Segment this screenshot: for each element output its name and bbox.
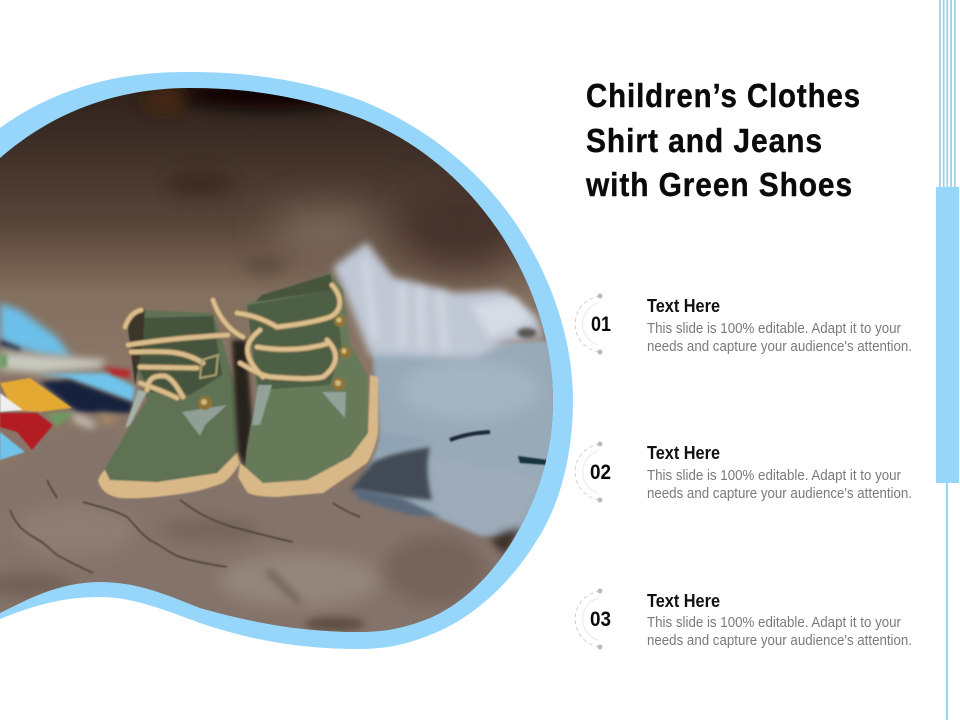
text block 02	[647, 443, 912, 502]
blue blob frame	[0, 72, 573, 649]
icon: number ring 03: 03	[590, 608, 611, 631]
icon: number ring 03	[575, 588, 611, 650]
striped clothes at left	[0, 303, 135, 460]
photo: baby boots on blanket	[0, 80, 560, 640]
icon: number ring 01: 01	[591, 313, 611, 336]
text block 03	[647, 591, 912, 649]
text block 03: This slide is 100% editable. Adapt it to your	[647, 615, 901, 631]
text block 02: This slide is 100% editable. Adapt it to your	[647, 468, 901, 484]
left boot	[98, 308, 240, 498]
item 03	[575, 588, 912, 650]
text block 01: needs and capture your audience's attention.	[647, 339, 912, 355]
right decoration: stripes and bar	[936, 0, 959, 720]
blanket	[0, 479, 524, 632]
striped shirt	[333, 242, 543, 357]
text block 03: Text Here	[647, 591, 720, 611]
item 01	[575, 294, 912, 355]
title: with Green Shoes	[585, 166, 853, 203]
shadow between boots	[232, 340, 252, 470]
text block 02: Text Here	[647, 443, 720, 463]
right boot	[213, 273, 378, 497]
title: Children’s Clothes	[586, 77, 861, 114]
laces left	[125, 310, 228, 398]
jeans	[350, 340, 556, 555]
icon: number ring 02	[575, 442, 611, 502]
text block 01: This slide is 100% editable. Adapt it to your	[647, 321, 901, 337]
icon: number ring 01	[575, 294, 611, 354]
laces right	[213, 285, 340, 379]
title: Shirt and Jeans	[586, 122, 823, 159]
text block 03: needs and capture your audience's attention.	[647, 633, 912, 649]
title	[585, 77, 861, 203]
photo background	[0, 80, 560, 640]
text block 01	[647, 296, 912, 355]
text block 02: needs and capture your audience's attention.	[647, 486, 912, 502]
icon: number ring 02: 02	[590, 461, 611, 484]
item 02	[575, 442, 912, 502]
text block 01: Text Here	[647, 296, 720, 316]
